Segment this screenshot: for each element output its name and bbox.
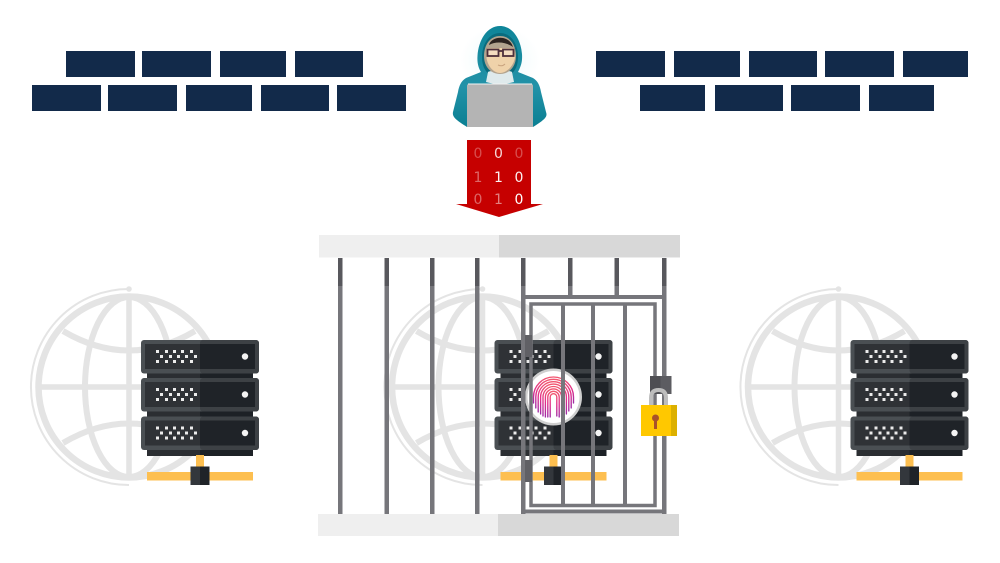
- hinges: [525, 335, 532, 482]
- binary digits: [474, 146, 523, 208]
- binary digits: 1: [494, 170, 503, 186]
- binary digits: 0: [515, 146, 523, 162]
- floor slab: [318, 514, 679, 536]
- globe and server: left: [31, 286, 259, 485]
- fixed prison bars: [338, 258, 666, 514]
- ceiling slab: [319, 235, 680, 258]
- globe and server: centre: [384, 286, 612, 485]
- binary digits: 1: [494, 192, 503, 208]
- redacted text blocks: right: [596, 51, 968, 111]
- cell door: [523, 297, 664, 512]
- laptop: [467, 84, 533, 127]
- binary digits: 0: [515, 170, 523, 186]
- arrow with binary digits: [456, 140, 543, 217]
- binary digits: 0: [494, 146, 503, 162]
- globe and server: right: [740, 286, 968, 485]
- glasses: [488, 50, 514, 56]
- fingerprint badge: [525, 368, 582, 426]
- redacted text blocks: left: [32, 51, 406, 111]
- icon: hacker with laptop: [453, 26, 546, 127]
- binary digits: 0: [474, 192, 482, 208]
- binary digits: 0: [474, 146, 482, 162]
- padlock: [641, 376, 677, 436]
- binary digits: 1: [474, 170, 482, 186]
- binary digits: 0: [515, 192, 523, 208]
